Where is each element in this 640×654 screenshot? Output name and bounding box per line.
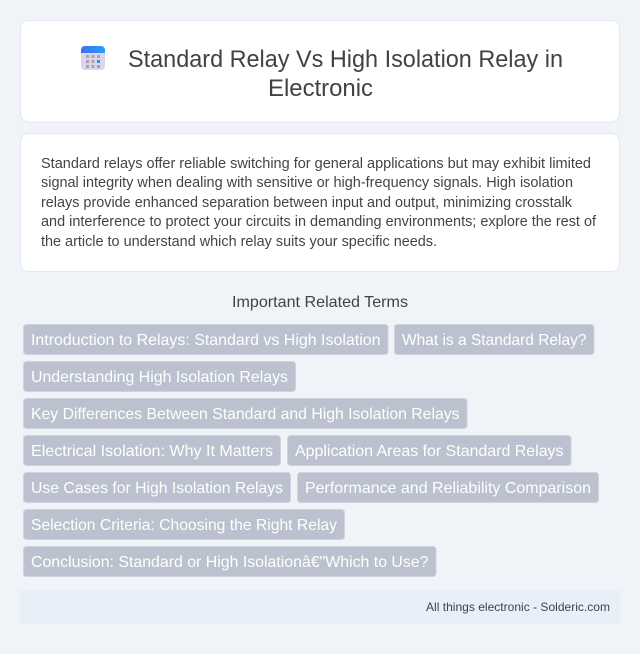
- tag: [24, 510, 344, 540]
- tag: Performance and Reliability Comparison: [305, 480, 591, 497]
- title: Electronic: [268, 75, 373, 102]
- tag: Introduction to Relays: Standard vs High Isolation: [31, 332, 380, 349]
- description text: and interference to protect your circuits in demanding environments; explore the rest of: [41, 214, 597, 230]
- tag: [24, 546, 436, 576]
- tag: [394, 324, 594, 354]
- tag: Application Areas for Standard Relays: [295, 443, 564, 460]
- panel: description card: [20, 134, 620, 272]
- tag: Understanding High Isolation Relays: [31, 369, 288, 386]
- panel: title card: [20, 20, 620, 122]
- footer: [20, 590, 620, 624]
- title: [128, 46, 563, 102]
- description text: Standard relays offer reliable switching for general applications but may exhibit limited: [41, 156, 591, 172]
- tag list: [24, 324, 598, 576]
- tag: What is a Standard Relay?: [402, 332, 587, 349]
- tag: [298, 472, 598, 502]
- tag: Selection Criteria: Choosing the Right Relay: [31, 517, 337, 534]
- tag: Conclusion: Standard or High Isolationâ€"Which to Use?: [31, 554, 429, 571]
- description text: [41, 156, 597, 250]
- tag: [24, 398, 467, 428]
- tag: [288, 436, 571, 466]
- title: Standard Relay Vs High Isolation Relay in: [128, 46, 563, 73]
- tag: [24, 362, 296, 392]
- heading: important related terms: Important Related Terms: [232, 294, 408, 311]
- icon: calendar: [81, 46, 105, 70]
- description text: relays provide enhanced separation between input and output, minimizing crosstalk: [41, 195, 573, 211]
- description text: signal integrity when dealing with sensitive or high-frequency signals. High isolation: [41, 175, 573, 191]
- tag: Key Differences Between Standard and High Isolation Relays: [31, 406, 460, 423]
- tag: [24, 324, 388, 354]
- tag: Use Cases for High Isolation Relays: [31, 480, 283, 497]
- tag: Electrical Isolation: Why It Matters: [31, 443, 273, 460]
- footer: All things electronic - Solderic.com: [426, 600, 610, 614]
- tag: [24, 436, 280, 466]
- tag: [24, 472, 290, 502]
- description text: the article to understand which relay suits your specific needs.: [41, 234, 437, 250]
